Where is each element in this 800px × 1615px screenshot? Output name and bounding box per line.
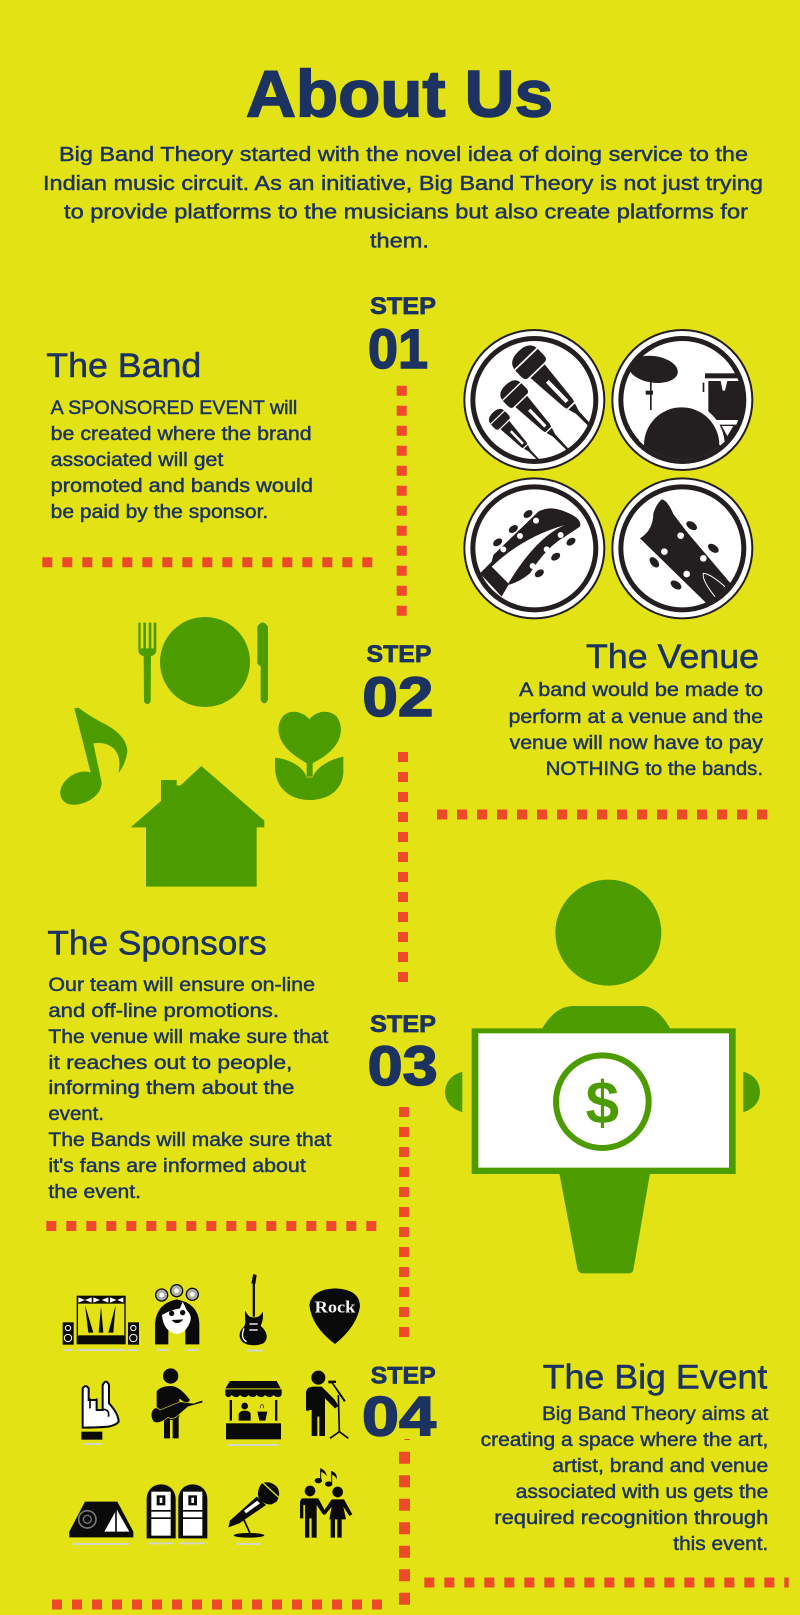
- panel: the sponsors text: Our team will ensure on-line: [48, 975, 315, 996]
- icon: guitar headstock right: [611, 477, 753, 619]
- panel: the big event text: associated with us gets the: [516, 1482, 768, 1503]
- icon: guitar headstock left: [463, 477, 605, 619]
- icon: stage: [63, 1296, 139, 1350]
- panel: the band text: associated will get: [51, 450, 224, 471]
- intro paragraph: them.: [370, 230, 429, 252]
- step 02 label: [362, 641, 433, 728]
- step 03 label: 03: [368, 1034, 438, 1097]
- panel: the band text: The Band: [46, 347, 201, 385]
- intro paragraph: Indian music circuit. As an initiative, Big Band Theory is not just trying: [43, 173, 763, 195]
- panel: the sponsors text: [47, 924, 332, 1203]
- panel: the sponsors text: informing them about the: [48, 1078, 294, 1099]
- panel: the big event text: this event.: [673, 1534, 768, 1555]
- icon: rock hand sign: [81, 1382, 119, 1444]
- dashed connector lines: [42, 386, 789, 1606]
- panel: the sponsors text: it reaches out to people,: [48, 1053, 292, 1074]
- intro paragraph: [43, 144, 763, 252]
- icon: guitarist: [151, 1368, 203, 1438]
- icon: person holding money sign: $: [586, 1069, 619, 1136]
- panel: the big event text: required recognition through: [494, 1508, 768, 1529]
- panel: the venue text: NOTHING to the bands.: [546, 759, 763, 780]
- panel: the big event text: [481, 1358, 769, 1555]
- panel: the sponsors text: and off-line promotions.: [48, 1001, 279, 1022]
- icon: guitar pick with Rock: [309, 1288, 360, 1344]
- icon: knife: [257, 622, 268, 703]
- panel: the band text: be created where the brand: [51, 424, 312, 445]
- icons: festival pictograms: [63, 1274, 360, 1544]
- panel: the big event text: Big Band Theory aims at: [542, 1404, 769, 1425]
- icon: music note: [60, 708, 127, 805]
- panel: the sponsors text: event.: [48, 1104, 104, 1125]
- step 03 label: STEP: [370, 1011, 436, 1038]
- icon: drum kit: [611, 329, 754, 471]
- icons: band instruments: [463, 329, 753, 619]
- step 03 label: [368, 1011, 438, 1097]
- icon: couple with music notes: [300, 1468, 352, 1538]
- icon: girl with flower crown: [155, 1285, 199, 1350]
- icon: microphones: [463, 329, 615, 474]
- intro paragraph: Big Band Theory started with the novel idea of doing service to the: [59, 144, 748, 166]
- step 04 label: STEP: [371, 1362, 436, 1389]
- intro paragraph: to provide platforms to the musicians but also create platforms for: [64, 202, 748, 224]
- icon: house: [131, 766, 264, 887]
- panel: the sponsors text: The Bands will make sure that: [48, 1130, 332, 1151]
- panel: the venue text: venue will now have to pay: [510, 733, 764, 754]
- panel: the big event text: artist, brand and venue: [552, 1456, 768, 1477]
- icon: food stall: [225, 1381, 282, 1445]
- icon: tent: [69, 1502, 133, 1544]
- panel: the big event text: creating a space where the art,: [481, 1430, 768, 1451]
- panel: the sponsors text: the event.: [48, 1182, 141, 1203]
- panel: the band text: A SPONSORED EVENT will: [51, 398, 297, 419]
- icon: singer at microphone: [306, 1371, 348, 1438]
- step 02 label: 02: [362, 665, 433, 728]
- icon: microphone on stand: [228, 1482, 279, 1544]
- icon: heart flower: [275, 712, 343, 800]
- panel: the venue text: [509, 638, 764, 780]
- panel: the sponsors text: it's fans are informed about: [48, 1156, 307, 1177]
- panel: the sponsors text: The venue will make sure that: [48, 1027, 329, 1048]
- icon: electric guitar: [240, 1274, 267, 1351]
- step 02 label: STEP: [366, 641, 432, 668]
- panel: the band text: promoted and bands would: [51, 476, 313, 497]
- step 01 label: STEP: [370, 293, 436, 320]
- panel: the big event text: The Big Event: [543, 1358, 768, 1396]
- icon: plate: [160, 617, 250, 707]
- step 04 label: 04: [362, 1385, 436, 1448]
- panel: the band text: be paid by the sponsor.: [51, 502, 268, 523]
- step 04 label: [362, 1362, 436, 1448]
- icon: portable toilets: [147, 1484, 207, 1543]
- icons: venue green icons: [60, 617, 343, 887]
- panel: the venue text: perform at a venue and the: [509, 707, 763, 728]
- icon: person holding money sign: [445, 880, 760, 1273]
- title: About Us: [246, 56, 553, 130]
- step 01 label: 01: [368, 317, 428, 380]
- icon: fork: [138, 623, 156, 704]
- panel: the venue text: The Venue: [586, 638, 759, 676]
- panel: the sponsors text: The Sponsors: [47, 924, 267, 962]
- icon: guitar pick with Rock: Rock: [315, 1298, 356, 1317]
- panel: the band text: [46, 347, 313, 523]
- step 01 label: [368, 293, 436, 380]
- panel: the venue text: A band would be made to: [519, 680, 763, 701]
